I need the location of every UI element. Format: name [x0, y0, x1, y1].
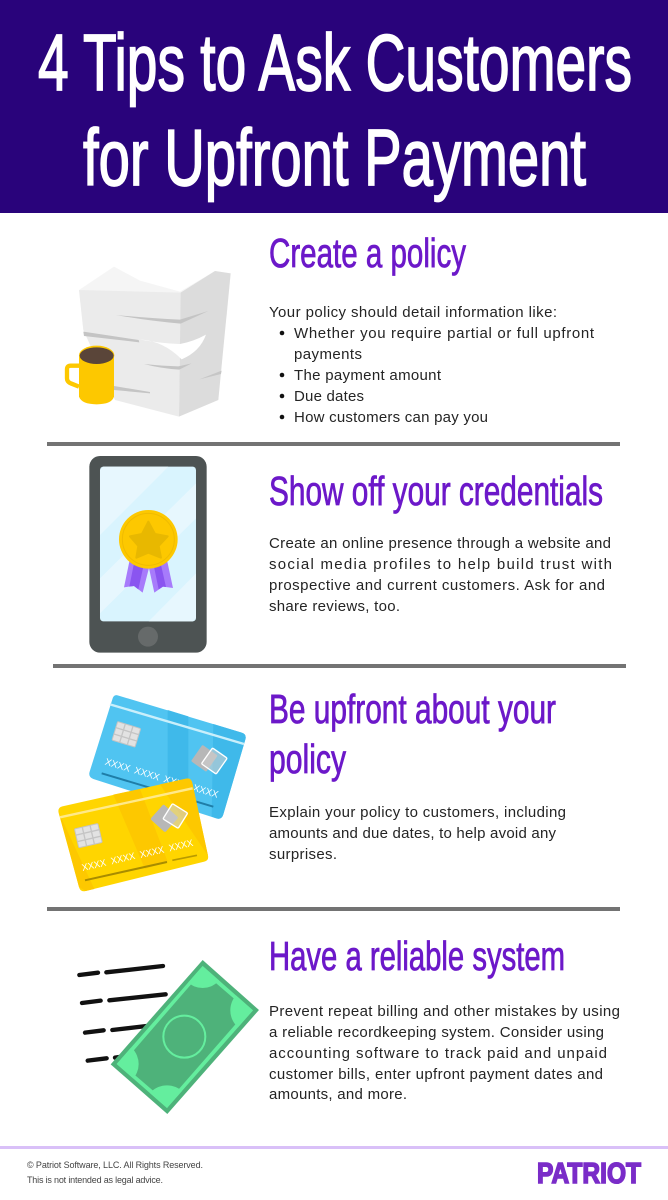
body text: Explain your policy to customers, including — [269, 804, 566, 821]
bullet list — [280, 325, 595, 426]
panel: have a reliable system — [269, 933, 620, 1103]
body text: amounts, and more. — [269, 1086, 407, 1103]
speed lines — [79, 966, 166, 1061]
bullet list: Whether you require partial or full upfront — [294, 325, 595, 342]
blue card: XXXX — [191, 783, 220, 801]
body text: social media profiles to help build trust with — [269, 556, 612, 573]
blue card — [89, 695, 246, 819]
footer — [0, 1146, 668, 1190]
icon: flying dollar bill — [77, 960, 259, 1114]
body text: prospective and current customers. Ask for and — [269, 577, 605, 594]
medal ribbons — [124, 562, 173, 593]
bullet list: Due dates — [294, 388, 364, 405]
heading: Create a policy — [269, 230, 466, 276]
yellow card — [58, 778, 208, 891]
body text: share reviews, too. — [269, 598, 400, 615]
bill — [111, 960, 259, 1114]
home button — [138, 627, 158, 647]
mug body — [79, 355, 114, 404]
yellow card: XXXX — [168, 838, 195, 854]
copyright note: © Patriot Software, LLC. All Rights Reserved. — [27, 1160, 203, 1170]
heading: policy — [269, 736, 346, 782]
body text: Create an online presence through a website and — [269, 535, 611, 552]
body text — [269, 1003, 620, 1103]
body text — [269, 804, 566, 863]
medal star — [130, 522, 168, 558]
yellow card: XXXX — [110, 851, 137, 867]
bullet list: How customers can pay you — [294, 409, 488, 426]
body text: amounts and due dates, to help avoid any — [269, 825, 556, 842]
blue card: XXXX — [133, 765, 161, 784]
blue card: XXXX — [103, 757, 132, 775]
mug handle — [67, 366, 79, 387]
copyright note: This is not intended as legal advice. — [27, 1175, 163, 1185]
bullet list: The payment amount — [294, 367, 442, 384]
heading — [269, 686, 556, 782]
copyright note — [27, 1160, 203, 1185]
icon: phone with medal — [89, 456, 207, 653]
intro text: Your policy should detail information like: — [269, 304, 557, 321]
body text: surprises. — [269, 846, 337, 863]
bullet list: payments — [294, 346, 362, 363]
yellow card: XXXX — [139, 845, 166, 861]
icon: credit cards — [58, 695, 246, 891]
title banner — [0, 0, 668, 213]
body text: customer bills, enter upfront payment dates and — [269, 1066, 603, 1083]
body text: Prevent repeat billing and other mistakes by using — [269, 1003, 620, 1020]
logo: Patriot wordmark: PATRIOT — [537, 1158, 641, 1190]
blue card: XXXX — [162, 774, 191, 792]
body text: a reliable recordkeeping system. Consider using — [269, 1024, 604, 1041]
panel: create a policy — [269, 230, 595, 426]
panel: show off your credentials — [269, 468, 612, 615]
yellow card: XXXX — [81, 858, 108, 874]
body text: accounting software to track paid and unpaid — [269, 1045, 607, 1062]
heading: Be upfront about your — [269, 686, 556, 732]
medal disc — [119, 510, 178, 569]
body text — [269, 535, 612, 615]
panel: be upfront about your policy — [269, 686, 566, 863]
icon: stack of paper and yellow mug — [67, 267, 231, 417]
